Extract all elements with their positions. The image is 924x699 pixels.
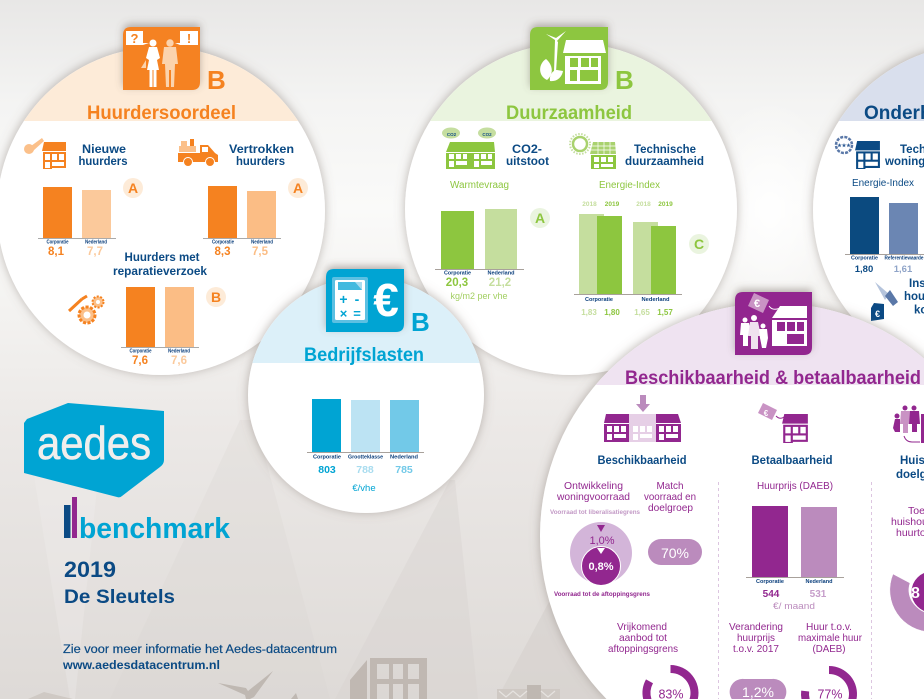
bar chart: vertrokken huurders <box>203 186 281 258</box>
title: 2019 de sleutels: 2019 <box>64 557 116 582</box>
bar chart: energie-index: 1,65 <box>634 308 650 317</box>
label: warmtevraag: Warmtevraag <box>450 180 509 191</box>
bar chart: energie-index: Corporatie <box>585 297 613 303</box>
text: ontwikkeling woningvoorraad: Voorraad tot liberalisatiegrens <box>550 509 640 516</box>
label: energie-index: Energie-Index <box>599 180 660 191</box>
bar chart: warmtevraag: Nederland <box>488 270 514 276</box>
donut: 77% <box>801 666 857 699</box>
label: co2-uitstoot <box>506 144 549 168</box>
bar chart: nieuwe huurders: Nederland <box>85 240 107 246</box>
donut: huishoudens: 8 <box>911 585 920 602</box>
bar chart: energie-index: 1,83 <box>581 308 597 317</box>
label: technische duurzaamheid: duurzaamheid <box>625 156 704 168</box>
label: instandhoudingskosten <box>904 278 924 316</box>
panel: duurzaamheid <box>405 27 737 375</box>
text: match voorraad en doelgroep <box>644 480 696 514</box>
bar chart: warmtevraag <box>435 209 524 302</box>
bar chart: warmtevraag: kg/m2 per vhe <box>450 291 508 302</box>
icon: co2 houses <box>442 128 496 169</box>
icon: calculator and euro: + <box>339 291 348 307</box>
text: huurprijs: Huurprijs (DAEB) <box>757 480 833 492</box>
icon: co2 houses: CO2 <box>482 132 492 137</box>
bar chart: energie-index: Corporatie <box>851 256 878 262</box>
label: huurders met reparatieverzoek <box>113 252 208 278</box>
text: vrijkomend aanbod: aftoppingsgrens <box>608 643 678 655</box>
grade: B: B <box>411 307 430 337</box>
grade badge <box>206 287 226 307</box>
text: ontwikkeling woningvoorraad: woningvoorraad <box>556 491 630 503</box>
bar chart: reparatieverzoek: 7,6 <box>132 355 148 367</box>
bar chart: vertrokken huurders: 7,5 <box>252 246 269 258</box>
bar chart: huurprijs: Nederland <box>806 579 832 585</box>
bar chart: huurprijs <box>746 506 844 612</box>
bar chart: warmtevraag: Corporatie <box>444 270 471 276</box>
text: meer informatie: Zie voor meer informatie het Aedes-datacentrum <box>63 644 337 656</box>
label: vertrokken huurders: huurders <box>236 156 285 168</box>
bar chart: nieuwe huurders: Corporatie <box>46 240 69 246</box>
text: meer informatie <box>62 644 337 672</box>
icon: huurders <box>123 27 200 90</box>
text: meer informatie: www.aedesdatacentrum.nl <box>62 660 220 672</box>
bar chart: energie-index: 1,61 <box>894 264 913 275</box>
text: verandering huurprijs <box>729 621 783 655</box>
text: huur tov maximale huur: maximale huur <box>798 632 862 644</box>
bar chart: vertrokken huurders: 8,3 <box>214 246 230 258</box>
text: vrijkomend aanbod: Vrijkomend <box>617 621 667 633</box>
icon: tag and house: € <box>764 409 769 418</box>
icon: tag and house <box>758 403 808 443</box>
bar chart: energie-index <box>574 201 682 317</box>
bar chart: reparatieverzoek: Corporatie <box>130 348 152 354</box>
bar chart: huurprijs: 544 <box>763 589 780 600</box>
bar chart: bedrijfslasten: 803 <box>318 464 336 476</box>
icon: wrench and gears <box>69 296 104 323</box>
bar chart: reparatieverzoek: 7,6 <box>171 355 187 367</box>
icon: family and house <box>893 406 924 443</box>
text: vrijkomend aanbod: aanbod tot <box>619 632 667 644</box>
label: nieuwe huurders: Nieuwe <box>82 144 126 156</box>
label: technische duurzaamheid: Technische <box>634 144 696 156</box>
bar chart: warmtevraag: 20,3 <box>446 277 468 289</box>
text: huur tov maximale huur <box>798 621 862 655</box>
text: match voorraad en doelgroep: doelgroep <box>648 502 693 514</box>
icon: huurders: ? <box>131 31 139 46</box>
text: toegewezen huishoudens <box>891 505 924 539</box>
label: energie-index: Energie-Index <box>852 178 914 189</box>
text: verandering huurprijs: t.o.v. 2017 <box>733 643 779 655</box>
bar chart: bedrijfslasten: 788 <box>356 464 374 476</box>
bar chart: bedrijfslasten: €/vhe <box>352 483 376 494</box>
icon: key and house <box>24 138 66 169</box>
grade badge: A <box>535 210 545 226</box>
bar chart: bedrijfslasten: Nederland <box>390 454 418 460</box>
bar chart: nieuwe huurders: 8,1 <box>48 246 65 258</box>
text: ontwikkeling woningvoorraad <box>550 480 640 516</box>
title: 2019 de sleutels <box>64 557 175 608</box>
heading: duurzaamheid: Duurzaamheid <box>506 103 632 124</box>
bar chart: energie-index: 1,57 <box>657 308 673 317</box>
bar chart: bedrijfslasten: 785 <box>395 464 413 476</box>
bar chart: reparatieverzoek: Nederland <box>168 348 190 354</box>
icon: solar house <box>570 134 616 169</box>
bar chart: bedrijfslasten: Corporatie <box>313 454 341 460</box>
panel: onderhoud <box>813 44 924 376</box>
grade badge: A <box>128 180 138 196</box>
icon: huurders: ! <box>187 31 191 46</box>
icon: calculator and euro: × <box>340 306 348 321</box>
bar chart: huurprijs: €/ maand <box>773 601 815 612</box>
bar chart: energie-index: 2019 <box>605 201 620 208</box>
icon: calculator and euro: - <box>355 291 360 307</box>
silhouette: crane <box>497 685 560 699</box>
grade badge <box>123 178 143 198</box>
label: beschikbaarheid: Beschikbaarheid <box>598 455 686 467</box>
icon: quality house <box>836 137 880 169</box>
label: vertrokken huurders: Vertrokken <box>229 144 294 156</box>
pill: 1,2% <box>730 679 786 699</box>
icon: paint brush and tag: € <box>875 309 880 319</box>
bar chart: energie-index <box>845 197 924 275</box>
pill: 70%: 70% <box>661 545 689 561</box>
icon: duurzaamheid <box>530 27 608 90</box>
icon: moving truck <box>178 139 218 166</box>
grade badge <box>288 178 308 198</box>
chart: nested circles: Voorraad tot de aftoppingsgrens <box>554 591 650 598</box>
icon: co2 houses: CO2 <box>447 132 457 137</box>
icon: arrow and row of houses <box>604 395 681 442</box>
icon: family, tag and house <box>735 292 812 355</box>
bar chart: huurprijs: 531 <box>810 589 827 600</box>
bar chart: nieuwe huurders: 7,7 <box>87 246 103 258</box>
donut: huishoudens <box>890 571 924 632</box>
bar chart: nieuwe huurders <box>38 187 116 258</box>
silhouette: building <box>350 658 427 699</box>
heading: huurdersoordeel: Huurdersoordeel <box>87 103 236 124</box>
logo: aedes <box>24 403 164 497</box>
bar chart: energie-index: Nederland <box>642 297 670 303</box>
grade badge: A <box>293 180 303 196</box>
chart: nested circles: 1,0% <box>589 535 615 547</box>
text: huur tov maximale huur: Huur t.o.v. <box>806 621 852 633</box>
grade badge <box>689 234 709 254</box>
label: nieuwe huurders <box>78 144 128 168</box>
grade badge <box>530 208 550 228</box>
icon: quality house: ★★★ <box>837 143 851 149</box>
grade badge: C <box>694 236 704 252</box>
pill: 70% <box>648 539 702 565</box>
panel: bedrijfslasten <box>248 269 484 513</box>
icon: calculator and euro <box>326 269 404 332</box>
silhouette: wind turbine <box>218 671 298 699</box>
bar chart: vertrokken huurders: Corporatie <box>212 240 234 246</box>
text: huur tov maximale huur: (DAEB) <box>812 643 846 655</box>
bar chart: energie-index: 2019 <box>658 201 673 208</box>
panel: huurdersoordeel <box>0 27 325 375</box>
label: betaalbaarheid: Betaalbaarheid <box>752 455 832 467</box>
label: huisvesten doelgroep <box>896 455 924 481</box>
bar chart: energie-index: 1,80 <box>855 264 873 275</box>
title: 2019 de sleutels: De Sleutels <box>64 587 175 608</box>
logo: aedes: aedes <box>37 417 151 469</box>
logo: benchmark <box>64 497 231 545</box>
bar chart: warmtevraag: 21,2 <box>489 277 511 289</box>
icon: paint brush and tag <box>871 282 898 321</box>
chart: nested circles: 0,8% <box>588 561 614 573</box>
bar chart: huurprijs: Corporatie <box>756 579 784 585</box>
label: huurders met reparatieverzoek: reparatieverzoek <box>113 266 208 278</box>
text: verandering huurprijs: huurprijs <box>737 632 775 644</box>
bar chart: vertrokken huurders: Nederland <box>251 240 273 246</box>
panel: beschikbaarheid en betaalbaarheid <box>540 292 924 699</box>
bar chart: energie-index: 2018 <box>636 201 651 208</box>
label: huurders met reparatieverzoek: Huurders met <box>124 252 200 264</box>
grade: B: B <box>207 65 226 95</box>
logo: benchmark: benchmark <box>79 513 231 545</box>
heading: bedrijfslasten: Bedrijfslasten <box>304 345 424 366</box>
icon: calculator and euro: € <box>373 274 399 326</box>
icon: calculator and euro: = <box>353 306 361 321</box>
text: ontwikkeling woningvoorraad: Ontwikkeling <box>564 480 623 492</box>
column dividers <box>718 482 872 699</box>
bar chart: bedrijfslasten: Grootteklasse <box>348 454 383 460</box>
bar chart: reparatieverzoek <box>121 287 199 367</box>
label: vertrokken huurders <box>229 144 294 168</box>
bar chart: energie-index: 1,80 <box>604 308 620 317</box>
donut: 83% <box>642 665 699 699</box>
text: verandering huurprijs: Verandering <box>729 621 783 633</box>
icon: family, tag and house: € <box>754 298 760 310</box>
grade: B: B <box>615 65 634 95</box>
bar chart: energie-index: 2018 <box>582 201 597 208</box>
label: nieuwe huurders: huurders <box>78 156 128 168</box>
grade badge: B <box>211 289 221 305</box>
text: match voorraad en doelgroep: voorraad en <box>644 491 696 503</box>
label: technische woningkwaliteit <box>884 144 924 168</box>
text: match voorraad en doelgroep: Match <box>656 480 684 492</box>
chart: nested circles <box>554 522 650 598</box>
label: co2-uitstoot: uitstoot <box>506 156 549 168</box>
bar chart: bedrijfslasten <box>307 399 424 494</box>
label: technische duurzaamheid <box>625 144 704 168</box>
label: co2-uitstoot: CO2- <box>512 144 542 156</box>
text: vrijkomend aanbod <box>608 621 678 655</box>
